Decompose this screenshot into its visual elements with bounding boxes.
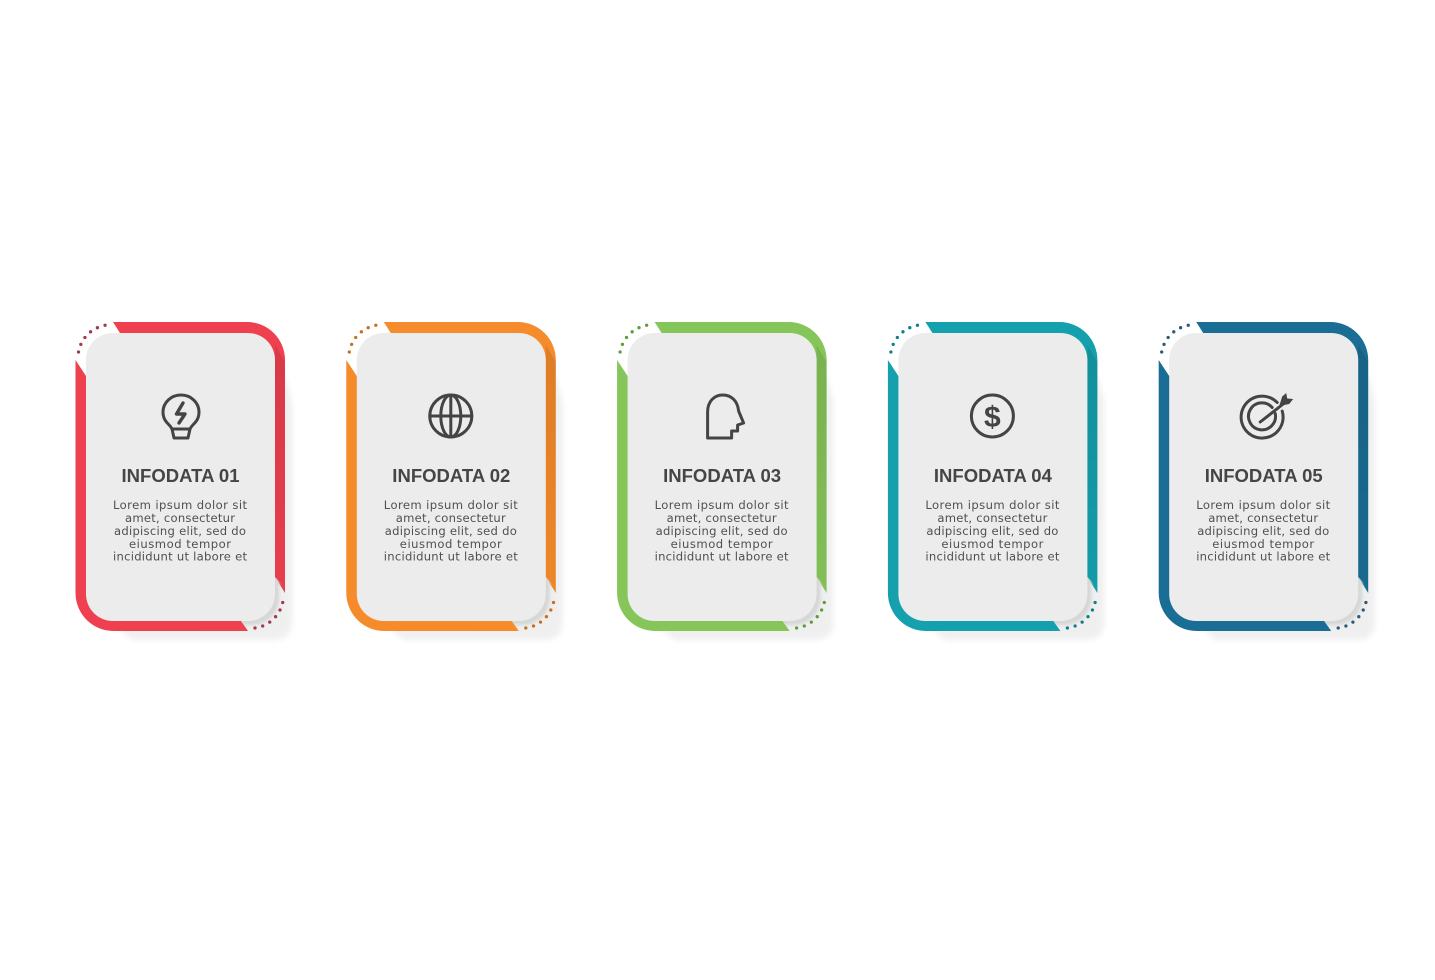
body text: Lorem ipsum dolor sit [925,498,1060,512]
corner shade [1054,577,1094,626]
band shading [1087,345,1097,593]
body text: adipiscing elit, sed do [926,524,1058,538]
dotted arcs [891,325,1095,628]
icon: dollar coin: $ [984,401,1001,434]
body text: amet, consectetur [396,511,506,525]
body text: adipiscing elit, sed do [114,524,246,538]
band shading [1358,345,1368,593]
corner shade [512,577,552,626]
body text: incididunt ut labore et [384,550,518,564]
icon: head profile [708,395,744,438]
body text: incididunt ut labore et [655,550,789,564]
dotted arcs [620,325,825,628]
card shadow [1198,376,1375,640]
band shading [275,345,285,593]
content panel [898,333,1087,621]
body text: eiusmod tempor [941,537,1044,551]
frame band [346,322,556,631]
dotted arcs [1162,325,1366,628]
icon: light bulb [163,395,199,438]
heading: INFODATA 04 [934,465,1053,486]
card 1 [76,322,292,640]
body text [113,498,247,564]
content panel [357,333,546,621]
body text: eiusmod tempor [400,537,502,551]
band shading [817,345,827,593]
body text: amet, consectetur [667,511,777,525]
frame band [1159,322,1368,631]
heading: INFODATA 03 [663,465,781,486]
body text: incididunt ut labore et [925,550,1060,564]
body text [655,498,789,564]
content panel [86,333,275,621]
corner shade [241,577,282,626]
frame band [76,322,285,631]
card 5 [1159,322,1375,640]
frame band [617,322,827,631]
body text [925,498,1060,564]
icon: target with arrow [1241,393,1293,438]
card 3 [617,322,834,640]
body text: amet, consectetur [125,511,235,525]
icon: dollar coin [971,395,1013,437]
heading: INFODATA 01 [122,465,240,486]
body text: eiusmod tempor [671,537,773,551]
corner shade [782,577,823,626]
body text: incididunt ut labore et [113,550,247,564]
body text: Lorem ipsum dolor sit [655,498,789,512]
card shadow [115,376,292,640]
body text: incididunt ut labore et [1196,550,1331,564]
body text: adipiscing elit, sed do [656,524,788,538]
dotted arcs [349,325,554,628]
card shadow [386,376,563,640]
frame band [888,322,1097,631]
card 4 [888,322,1104,640]
content panel [1169,333,1358,621]
body text [384,498,518,564]
content panel [628,333,817,621]
heading: INFODATA 05 [1205,465,1323,486]
body text: Lorem ipsum dolor sit [113,498,247,512]
body text [1196,498,1331,564]
body text: eiusmod tempor [1212,537,1314,551]
body text: amet, consectetur [1208,511,1318,525]
heading: INFODATA 02 [392,465,510,486]
dotted arcs [78,325,283,628]
card shadow [927,376,1104,640]
card shadow [657,376,834,640]
body text: Lorem ipsum dolor sit [384,498,518,512]
band shading [546,345,556,593]
icon: globe [430,395,472,437]
body text: Lorem ipsum dolor sit [1196,498,1331,512]
body text: adipiscing elit, sed do [385,524,517,538]
body text: eiusmod tempor [129,537,231,551]
body text: adipiscing elit, sed do [1197,524,1329,538]
corner shade [1324,577,1365,626]
card 2 [346,322,563,640]
body text: amet, consectetur [937,511,1048,525]
